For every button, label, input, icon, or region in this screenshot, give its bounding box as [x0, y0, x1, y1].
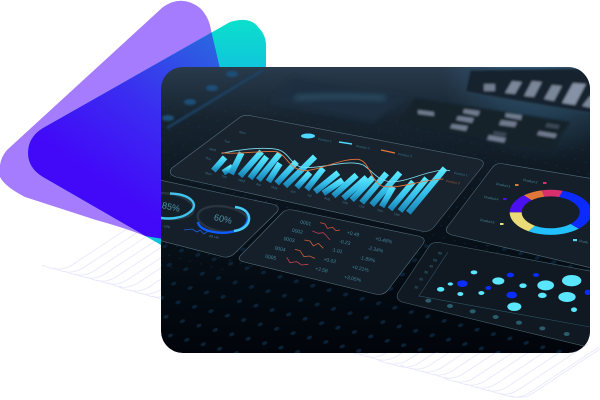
- donut labels: Product 2: [523, 178, 538, 185]
- table rows: 0002: [291, 228, 304, 236]
- chart axis labels: Jun: [290, 189, 296, 194]
- chart axis labels: Aug: [324, 196, 331, 201]
- table rows: +2.58: [315, 266, 328, 275]
- scatter y labels: 50: [433, 258, 437, 263]
- chart axis labels: Wed: [209, 147, 216, 152]
- chart axis labels: Dec: [394, 212, 401, 217]
- scatter y labels: 40: [429, 264, 433, 269]
- scatter y labels: 30: [424, 270, 428, 275]
- donut labels: Product 1: [496, 182, 511, 189]
- table rows: +3.05%: [344, 274, 362, 284]
- chart legend: Product 2: [356, 144, 370, 150]
- table rows: -1.89%: [359, 255, 376, 264]
- table rows: 0003: [283, 236, 295, 244]
- chart axis labels: Jul: [307, 193, 312, 198]
- donut labels: Product 5: [480, 218, 495, 225]
- gauge captions: +1%: [163, 224, 170, 229]
- donut ring: [510, 190, 590, 235]
- chart axis labels: Mon: [239, 130, 246, 135]
- table rows: +0.21%: [351, 264, 370, 274]
- scatter axes: [419, 252, 590, 327]
- gauge sparkline: [184, 229, 208, 234]
- donut labels: [480, 178, 589, 245]
- gauges panel: [161, 180, 278, 258]
- trend line labels: [446, 172, 468, 184]
- table rows: -2.34%: [367, 245, 384, 255]
- gauge: 60%: 60%: [213, 212, 233, 226]
- chart axis labels: Wed: [238, 178, 245, 183]
- blue overlap of triangles: [28, 32, 220, 239]
- table rows: 0005: [265, 254, 277, 262]
- background wavy line grid: [42, 219, 600, 397]
- table rows: -0.23: [339, 239, 351, 247]
- trend line labels: Product 3: [446, 179, 460, 185]
- blurred top-right bar panel: [466, 67, 590, 112]
- table sparklines: [287, 223, 340, 265]
- chart bars: [213, 152, 445, 213]
- chart legend: Product 3: [398, 152, 412, 158]
- main bar and line chart panel: [170, 115, 483, 232]
- table rows: +0.02: [323, 257, 337, 265]
- blurred top centre panel: [290, 81, 392, 122]
- chart axis labels: [205, 130, 401, 217]
- purple rounded triangle: [0, 0, 212, 236]
- table rows: +0.48%: [375, 236, 393, 246]
- chart axis labels: Apr: [256, 182, 263, 187]
- scatter x ticks: [425, 299, 570, 336]
- scatter y labels: [414, 251, 442, 290]
- trend line labels: Product 1: [454, 171, 468, 177]
- scatter y labels: 60: [438, 251, 442, 256]
- scatter chart panel: [397, 242, 600, 350]
- chart axis labels: Mon: [205, 171, 212, 176]
- chart legend: [301, 134, 412, 158]
- chart legend: Product 1: [318, 137, 332, 143]
- blurred flow chart panel: [400, 98, 570, 152]
- donut labels: Product 4: [484, 195, 499, 202]
- chart axis labels: Oct: [359, 204, 365, 209]
- dashboard card: [139, 67, 600, 353]
- table rows: -1.01: [331, 247, 343, 255]
- data table panel: [239, 210, 424, 294]
- scatter y labels: 10: [414, 285, 418, 290]
- chart axis labels: Sep: [342, 200, 349, 205]
- table rows: 0004: [274, 245, 286, 254]
- scatter y labels: 20: [419, 277, 423, 282]
- donut chart panel: [446, 164, 600, 270]
- gauge: 85%: 85%: [161, 200, 181, 214]
- table rows: 0001: [300, 219, 312, 228]
- chart axis labels: Tue: [221, 174, 227, 179]
- chart trend lines: [222, 148, 450, 187]
- teal rounded triangle: [28, 20, 266, 245]
- blurred background diagonal chart: [162, 70, 263, 128]
- scatter bubbles: [425, 270, 591, 336]
- chart axis labels: Thu: [205, 156, 211, 161]
- chart axis labels: Tue: [224, 139, 230, 144]
- table rows: [265, 219, 393, 284]
- gauge captions: [163, 225, 218, 239]
- gauge captions: #3 +%: [209, 234, 219, 240]
- donut labels: Produ: [579, 239, 589, 245]
- table rows: +0.49: [346, 230, 360, 239]
- chart axis labels: Nov: [377, 208, 384, 213]
- chart axis labels: May: [271, 185, 278, 190]
